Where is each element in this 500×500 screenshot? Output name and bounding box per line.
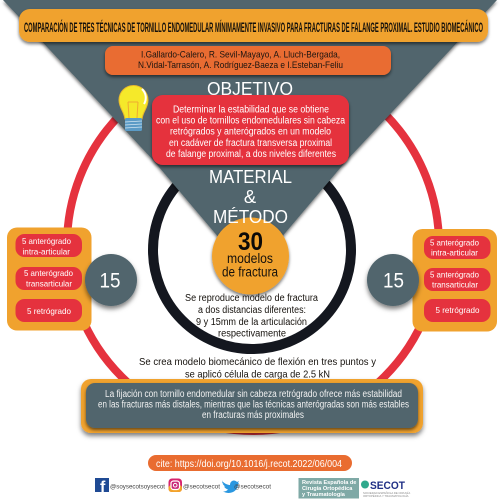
citation pill <box>148 455 352 471</box>
objective panel: Determinar la estabilidad que se obtiene <box>173 104 329 116</box>
panel: left group: transarticular <box>26 278 72 288</box>
heading: objetivo: OBJETIVO <box>207 78 293 99</box>
title bar <box>19 9 488 42</box>
twitter handle: @secotsecot <box>234 484 271 490</box>
text: fracture model: Se reproduce modelo de fractura <box>185 293 318 304</box>
panel: right group: 5 retrógrado <box>436 305 480 315</box>
panel: right group: intra-articular <box>431 248 478 258</box>
journal logo: Revista Española de <box>302 480 356 486</box>
panel: conclusion: en las fracturas más distales, mientras que las técnicas anterógradas son más estables <box>98 400 409 410</box>
objective panel: con el uso de tornillos endomedulares sin cabeza <box>156 116 345 126</box>
text: fracture model: 9 y 15mm de la articulación <box>196 317 307 328</box>
secot logo: ORTOPÉDICA Y TRAUMATOLOGÍA <box>363 493 409 498</box>
facebook handle: @soysecotsoysecot <box>110 484 165 490</box>
circle: left 15: 15 <box>100 270 120 292</box>
text: fracture model: a dos distancias diferentes: <box>198 305 306 316</box>
panel: left group <box>7 228 92 330</box>
heading: material y método: & <box>244 186 257 207</box>
red ring <box>67 59 439 431</box>
slate funnel triangle <box>3 0 497 245</box>
icon: facebook <box>95 478 109 496</box>
authors panel: I.Gallardo-Calero, R. Sevil-Mayayo, A. Lluch-Bergada, <box>141 50 340 60</box>
panel: right group: 5 anterógrado <box>430 270 479 280</box>
icon: facebook: f <box>100 479 106 496</box>
circle: 30 modelos de fractura: modelos <box>227 251 273 266</box>
secot logo <box>361 480 410 498</box>
circle: 30 modelos de fractura: de fractura <box>222 264 278 280</box>
panel: right group <box>412 229 497 332</box>
text: fracture model: respectivamente <box>218 328 286 340</box>
icon: light bulb <box>119 86 148 131</box>
citation pill: cite: https://doi.org/10.1016/j.recot.2022/06/004 <box>156 458 342 470</box>
circle: right 15 <box>367 254 419 306</box>
secot logo: SOCIEDAD ESPAÑOLA DE CIRUGÍA <box>363 490 410 495</box>
text: biomechanical model: se aplicó célula de carga de 2.5 kN <box>185 368 330 380</box>
panel: right group: 5 anterógrado <box>430 238 479 248</box>
objective panel <box>152 95 349 165</box>
text: biomechanical model: Se crea modelo biomecánico de flexión en tres puntos y <box>139 356 377 368</box>
journal logo: y Traumatología <box>302 492 346 498</box>
circle: 30 modelos de fractura <box>212 218 289 294</box>
objective panel: retrógrados y anterógrados en un modelo <box>170 126 331 138</box>
journal logo <box>298 478 359 498</box>
panel: conclusion: La fijación con tornillo endomedular sin cabeza retrógrado ofrece más estabilidad <box>105 389 402 400</box>
circle: right 15: 15 <box>383 270 404 292</box>
circle: left 15 <box>85 254 137 306</box>
instagram handle: @secotsecot <box>183 484 220 490</box>
panel: left group: 5 anterógrado <box>24 268 73 278</box>
panel: left group: 5 retrógrado <box>27 306 71 316</box>
objective panel: en cadáver de fractura transversa proximal <box>169 138 332 149</box>
secot logo: SECOT <box>370 480 405 492</box>
journal logo: Cirugía Ortopédica <box>302 486 353 492</box>
panel: right group: transarticular <box>432 280 478 290</box>
circle: 30 modelos de fractura: 30 <box>238 228 263 256</box>
panel: left group: intra-articular <box>22 246 70 256</box>
text: fracture model <box>185 293 318 340</box>
black ring <box>153 151 351 349</box>
panel: conclusion: en fracturas más proximales <box>202 410 304 421</box>
heading: material y método: MATERIAL <box>209 166 292 187</box>
authors panel: N.Vidal-Tarrasón, A. Rodríguez-Baeza e I.Esteban-Feliu <box>138 60 343 71</box>
text: biomechanical model <box>139 356 377 380</box>
icon: instagram <box>168 478 182 492</box>
heading: material y método <box>209 166 292 227</box>
objective panel: de falange proximal, a dos niveles diferentes <box>166 149 336 160</box>
panel: left group: 5 anterógrado <box>22 236 71 246</box>
authors panel <box>105 46 391 75</box>
panel: conclusion <box>81 379 423 433</box>
icon: twitter <box>222 480 239 493</box>
heading: material y método: MÉTODO <box>213 206 288 227</box>
